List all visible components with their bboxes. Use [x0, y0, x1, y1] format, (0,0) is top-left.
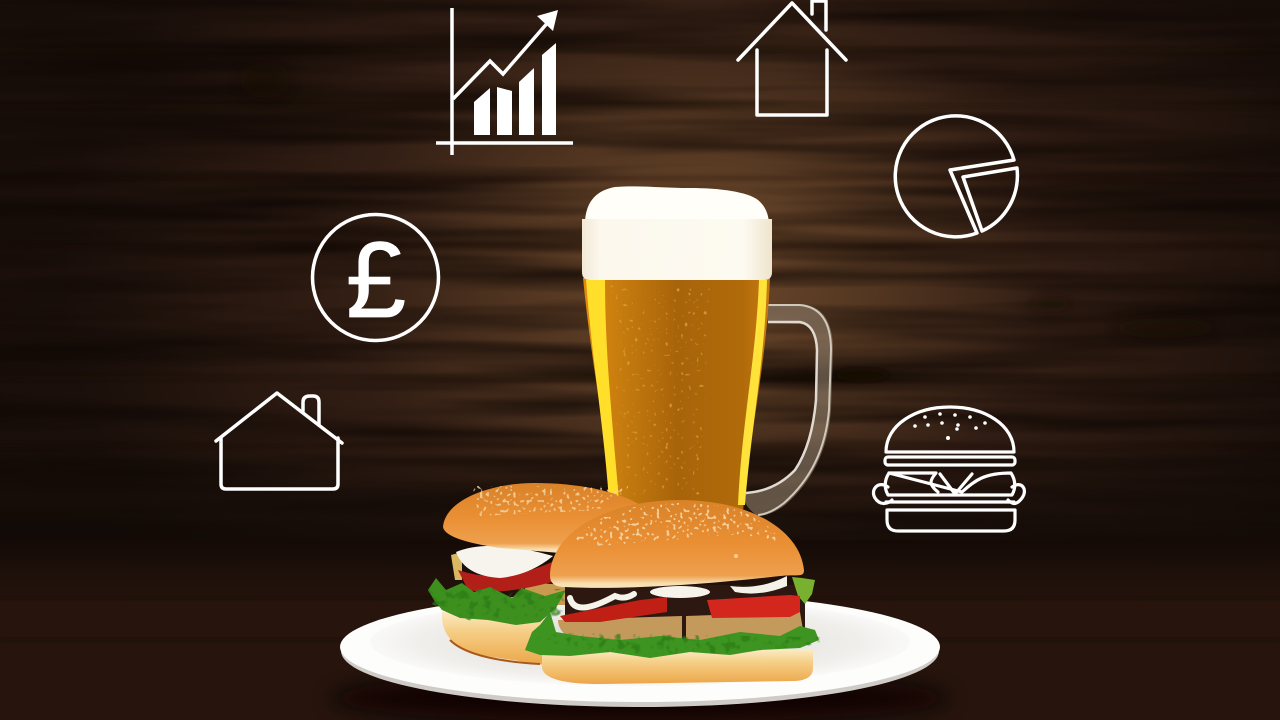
beer bubbles [610, 285, 710, 495]
beer highlights [586, 280, 619, 500]
beer mug [582, 186, 833, 522]
wooden table [0, 540, 1280, 720]
icon: pie chart [895, 116, 1017, 237]
icon: house left [216, 393, 342, 489]
icon: rising bar chart [436, 8, 573, 155]
plate [340, 592, 940, 707]
icon: pound coin [312, 214, 438, 340]
icon: pound coin: £ [346, 219, 406, 340]
beer body [583, 278, 770, 522]
wooden wall background [0, 0, 1280, 560]
foam head [582, 186, 772, 280]
sesame seeds [575, 503, 782, 546]
icon: house top right [738, 1, 846, 115]
back burger [428, 483, 640, 665]
icon: burger outline [873, 407, 1024, 531]
front burger [525, 500, 820, 684]
mug handle [744, 304, 833, 516]
